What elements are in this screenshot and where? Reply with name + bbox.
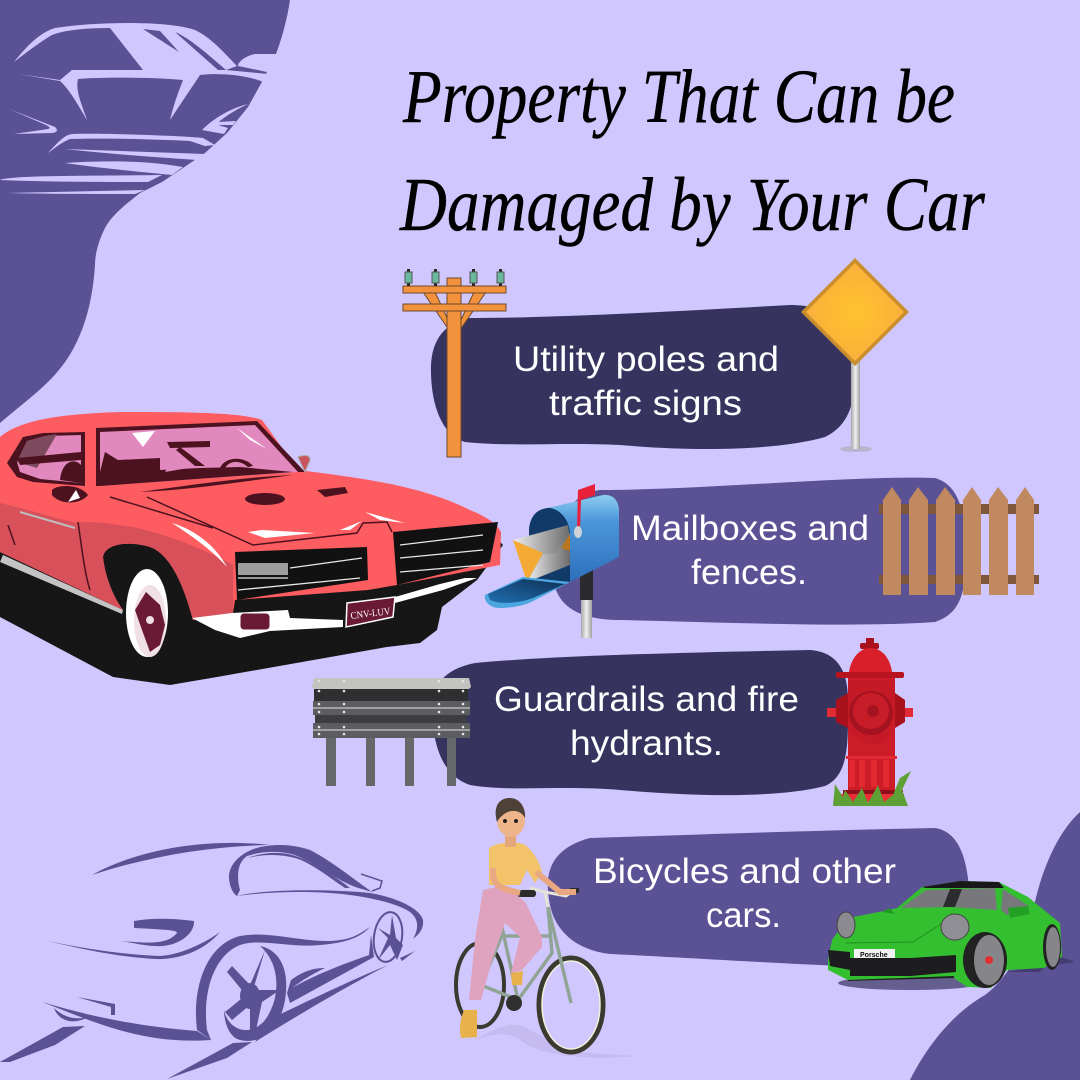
car body [0, 412, 501, 620]
icon: traffic sign [801, 258, 909, 452]
label blob 2 [553, 478, 966, 625]
car shadow and tyres [0, 500, 503, 685]
label blob 1 [431, 305, 856, 449]
icon: girl on bicycle [456, 798, 635, 1058]
car wheel [224, 946, 286, 1041]
title [399, 55, 985, 247]
icon: fence [879, 487, 1039, 595]
highlights [172, 512, 405, 567]
silver side trim [0, 555, 123, 614]
text: bicycles: Bicycles and other [593, 852, 896, 891]
front bumper [192, 610, 343, 638]
car line art: lower left [0, 843, 423, 1079]
panel: utility poles and traffic signs [403, 258, 909, 457]
text: mailboxes: fences. [691, 553, 807, 592]
icon: utility pole [403, 269, 506, 457]
icon: mailbox [485, 484, 619, 638]
title: Property That Can be [402, 55, 955, 139]
license plate [346, 597, 395, 627]
icon: fire hydrant [827, 638, 913, 806]
panel: guardrails and fire hydrants [312, 638, 913, 806]
icon: guardrail [312, 678, 471, 786]
corner blob with car line art [0, 0, 290, 423]
door line [8, 522, 90, 590]
corner blob: bottom right [910, 812, 1080, 1080]
text: utility poles [513, 340, 779, 423]
text: guardrails: hydrants. [570, 724, 723, 763]
text: utility poles: traffic signs [549, 384, 742, 423]
bike frame [481, 907, 571, 1003]
text: guardrails: Guardrails and fire [494, 680, 799, 719]
text: mailboxes [631, 509, 869, 592]
text: utility poles: Utility poles and [513, 340, 779, 379]
text: bicycles [593, 852, 896, 935]
hood scoops [245, 493, 285, 505]
illustration: red muscle car [0, 412, 503, 685]
windows [7, 432, 85, 486]
text: mailboxes: Mailboxes and [631, 509, 869, 548]
bike wheels [456, 943, 603, 1052]
plate text: Porsche [860, 952, 888, 959]
ground shadow [475, 1025, 635, 1058]
icon: green sports car [828, 881, 1075, 990]
text: guardrails [494, 680, 799, 763]
label blob 4 [548, 828, 970, 968]
panel: mailboxes and fences [485, 478, 1039, 638]
license plate: CNV-LUV [350, 606, 392, 622]
title: Damaged by Your Car [399, 163, 985, 247]
label blob 3 [432, 650, 848, 795]
text: bicycles: cars. [706, 896, 781, 935]
panel: bicycles and other cars [456, 798, 1075, 1058]
rider [460, 798, 576, 1038]
mirror [52, 486, 88, 502]
front wheel [126, 569, 168, 657]
grilles [235, 547, 368, 600]
